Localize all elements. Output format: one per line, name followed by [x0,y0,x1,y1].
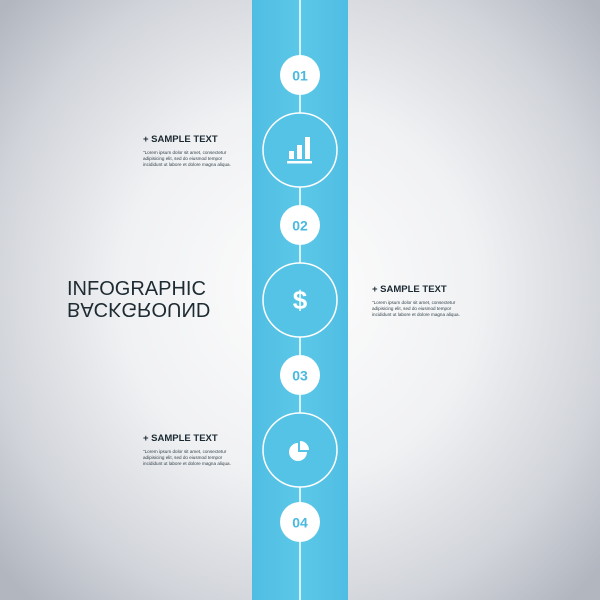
text block 2 [372,284,460,317]
text block 2: + SAMPLE TEXT [372,284,447,295]
step 03: 03 [292,368,308,384]
text block 1 [143,134,231,167]
text block 3: "Lorem ipsum dolor sit amet, consectetur adipisicing elit, sed do eiusmod tempor incididunt ut labore et dolore magna aliqua. [143,449,231,466]
step 01: 01 [292,68,308,84]
text block 2: "Lorem ipsum dolor sit amet, consectetur adipisicing elit, sed do eiusmod tempor incididunt ut labore et dolore magna aliqua. [372,300,460,317]
text block 3: + SAMPLE TEXT [143,433,218,444]
step 02: 02 [292,218,308,234]
text block 3 [143,433,231,466]
text block 1: "Lorem ipsum dolor sit amet, consectetur adipisicing elit, sed do eiusmod tempor incididunt ut labore et dolore magna aliqua. [143,150,231,167]
text block 1: + SAMPLE TEXT [143,134,218,145]
icon: bar chart [263,113,337,187]
icon: pie chart [263,413,337,487]
title: INFOGRAPHIC [67,278,206,300]
icon: dollar [263,263,337,337]
step 04: 04 [292,514,308,530]
step 03 [280,355,320,395]
icon: dollar: $ [293,285,308,315]
step 02 [280,205,320,245]
title: BACKGROUND [67,298,210,320]
step 01 [280,55,320,95]
title [67,278,210,320]
step 04 [280,502,320,542]
